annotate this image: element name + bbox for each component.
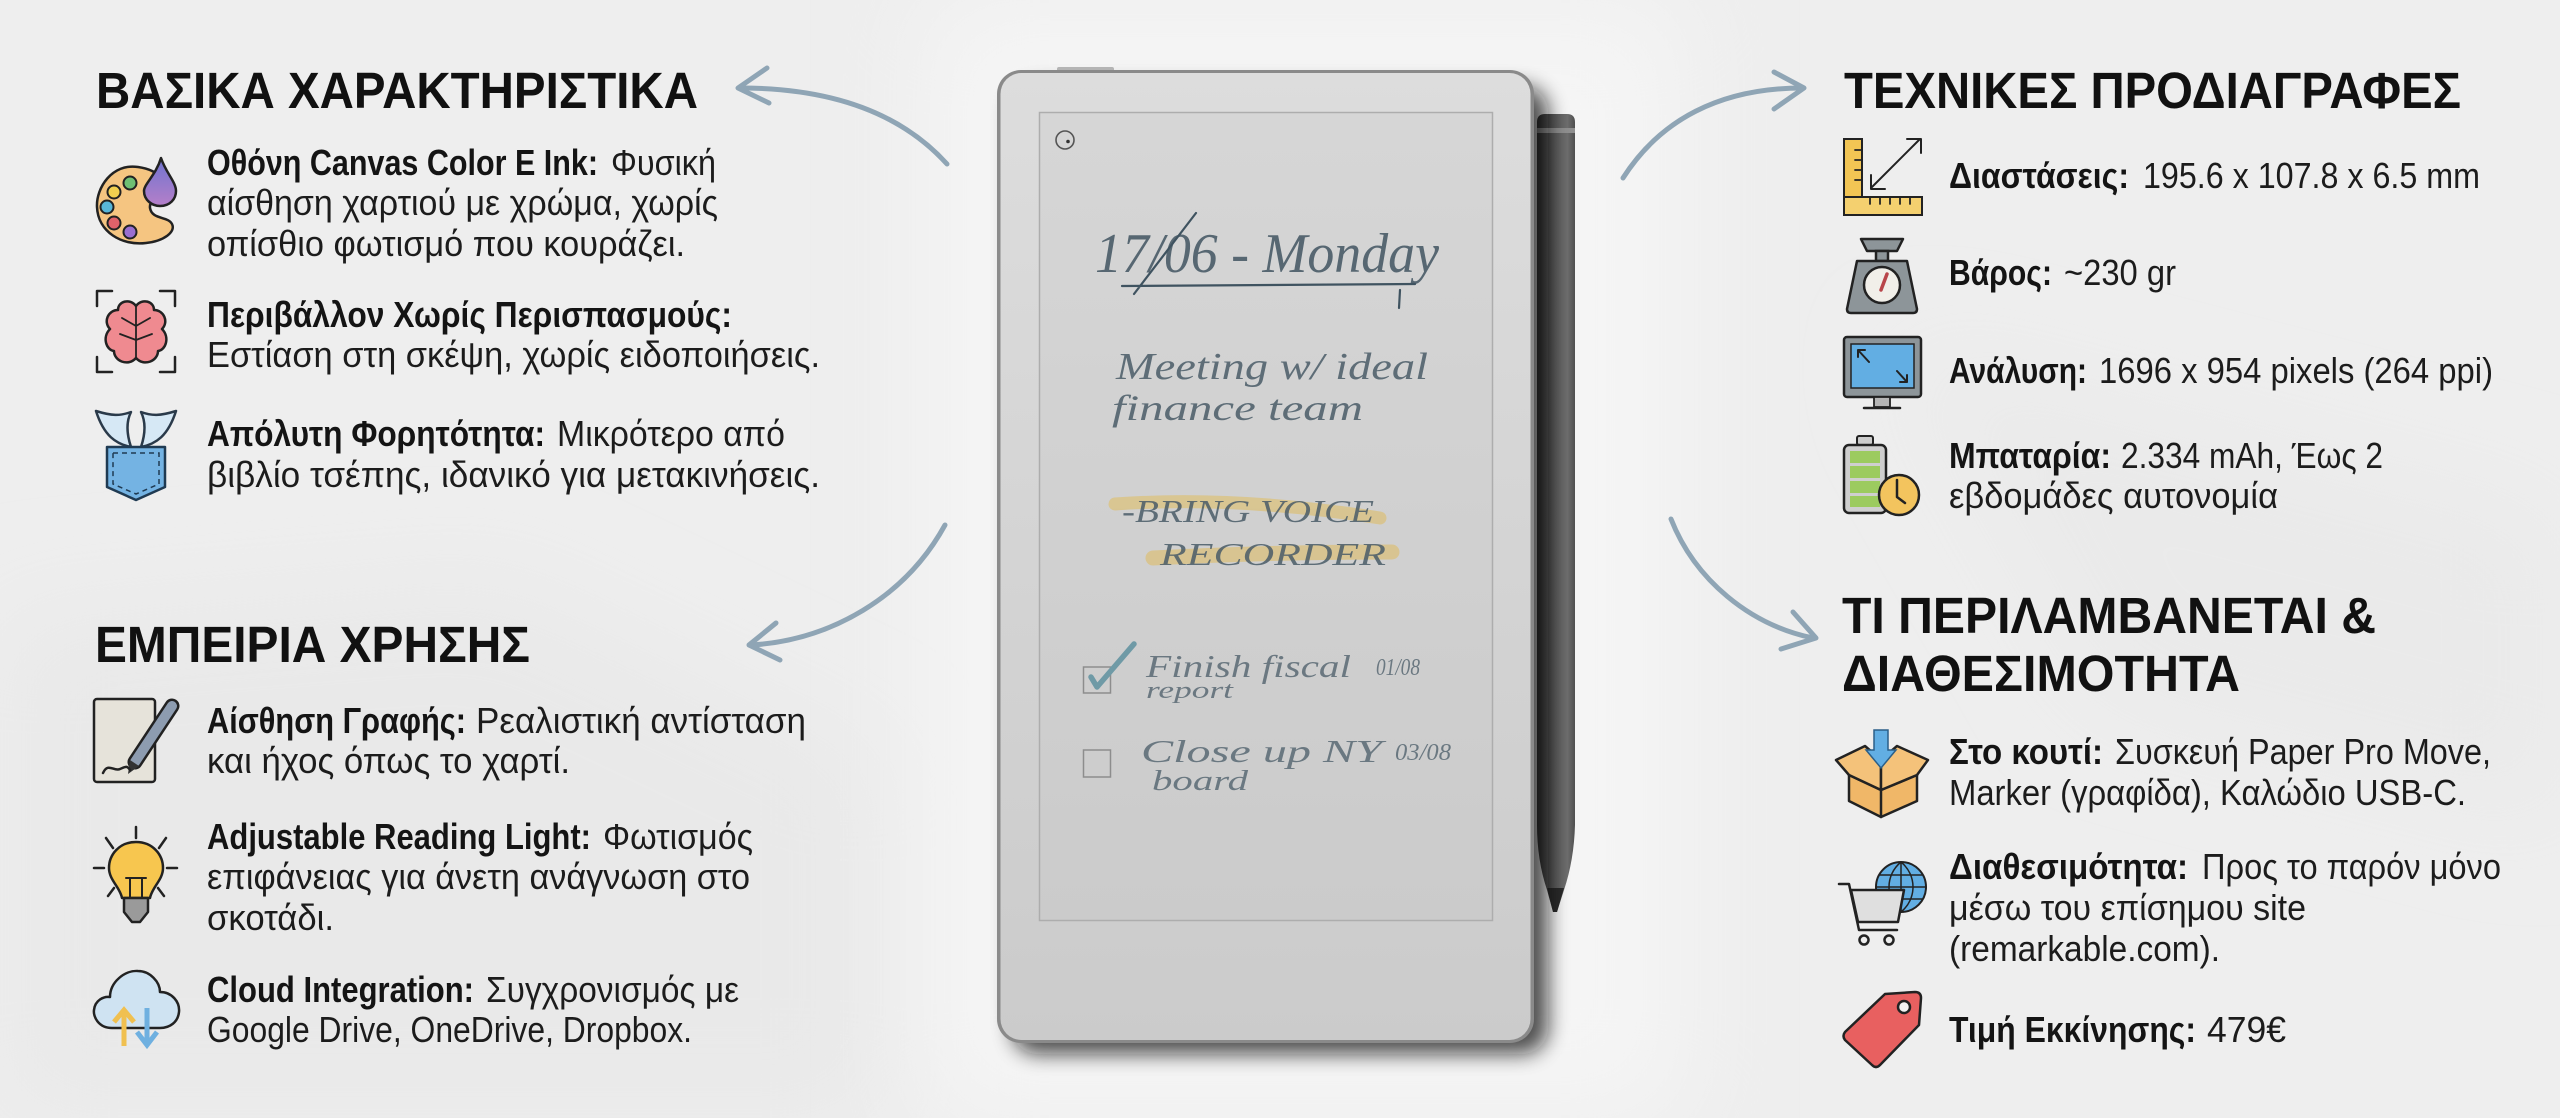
device shadow: [1012, 86, 1548, 1054]
item: distraction free: [97, 291, 820, 375]
panel: technical specs: [1844, 62, 2493, 516]
icon: price tag: [1844, 992, 1921, 1067]
text: adjustable reading light: [207, 816, 753, 938]
text: writing feel: Αίσθηση Γραφής:: [207, 700, 466, 741]
item: weight: [1847, 239, 2176, 313]
heading: box contents and availability: [1842, 587, 2376, 702]
text: adjustable reading light: σκοτάδι.: [207, 897, 334, 938]
icon: monitor: [1844, 337, 1921, 408]
item: in the box: [1836, 730, 2491, 817]
text: cloud integration: Google Drive, OneDrive, Dropbox.: [207, 1009, 692, 1050]
text: weight: ~230 gr: [2064, 252, 2176, 293]
text: availability: Προς το παρόν μόνο: [2202, 846, 2501, 887]
arrow: to key features: [738, 68, 947, 164]
icon: brain in focus frame: [97, 291, 175, 372]
text: writing feel: Ρεαλιστική αντίσταση: [476, 700, 806, 741]
item: availability: [1839, 846, 2501, 969]
checklist: board: [1152, 766, 1249, 797]
checklist: [1084, 644, 1451, 797]
item: dimensions: [1844, 139, 2480, 215]
handwritten note: RECORDER: [1159, 536, 1387, 572]
text: distraction free environment: Εστίαση στη σκέψη, χωρίς ειδοποιήσεις.: [207, 334, 820, 375]
icon: winged pocket: [96, 411, 176, 500]
highlighter marks: [1115, 502, 1392, 558]
handwritten note: -BRING VOICE: [1122, 493, 1375, 529]
item: portability: [96, 411, 820, 500]
text: absolute portability: [207, 413, 820, 495]
item: canvas color screen: [97, 142, 718, 264]
text: in the box: [1949, 731, 2491, 813]
heading: box contents and availability: ΔΙΑΘΕΣΙΜΟΤΗΤΑ: [1842, 645, 2240, 702]
text: adjustable reading light: Φωτισμός: [603, 816, 753, 857]
icon: cart and globe: [1839, 862, 1926, 944]
text: starting price: 479€: [2207, 1009, 2286, 1050]
panel: key features: [96, 62, 820, 500]
icon: light bulb: [94, 827, 177, 922]
icon: paper and pen: [94, 699, 172, 782]
item: reading light: [94, 816, 753, 938]
text: canvas color e ink: οπίσθιο φωτισμό που κουράζει.: [207, 223, 685, 264]
handwritten note: [1095, 213, 1439, 572]
item: writing feel: [94, 699, 806, 782]
text: absolute portability: Απόλυτη Φορητότητα:: [207, 413, 545, 454]
text: weight: [1949, 252, 2176, 293]
text: absolute portability: βιβλίο τσέπης, ιδανικό για μετακινήσεις.: [207, 454, 820, 495]
panel: box contents and availability: [1836, 587, 2501, 1067]
text: canvas color e ink: Φυσική: [611, 142, 716, 183]
item: battery: [1844, 435, 2383, 516]
text: resolution: [1949, 350, 2493, 391]
text: distraction free environment: [207, 294, 820, 375]
text: distraction free environment: Περιβάλλον Χωρίς Περισπασμούς:: [207, 294, 732, 335]
panel: user experience: [94, 616, 806, 1050]
device: e-ink tablet: [997, 67, 1534, 1043]
arrow: to technical specs: [1623, 72, 1804, 178]
text: availability: (remarkable.com).: [1949, 928, 2220, 969]
handwritten note: 17/06 - Monday: [1095, 223, 1439, 285]
text: availability: [1949, 846, 2501, 969]
text: cloud integration: Συγχρονισμός με: [486, 969, 739, 1010]
text: availability: μέσω του επίσημου site: [1949, 887, 2306, 928]
text: canvas color e ink: Οθόνη Canvas Color E Ink:: [207, 142, 598, 183]
stylus marker: [1537, 114, 1575, 912]
text: writing feel: και ήχος όπως το χαρτί.: [207, 740, 570, 781]
text: absolute portability: Μικρότερο από: [557, 413, 785, 454]
text: canvas color e ink: [207, 142, 718, 264]
checklist: report: [1146, 678, 1235, 704]
text: battery: 2.334 mAh, Έως 2: [2121, 435, 2383, 476]
text: dimensions: Διαστάσεις:: [1949, 155, 2129, 196]
text: cloud integration: Cloud Integration:: [207, 969, 474, 1010]
text: availability: Διαθεσιμότητα:: [1949, 846, 2188, 887]
text: weight: Βάρος:: [1949, 252, 2052, 293]
handwritten note: finance team: [1112, 388, 1363, 428]
heading: box contents and availability: ΤΙ ΠΕΡΙΛΑΜΒΑΝΕΤΑΙ &: [1842, 587, 2376, 644]
text: in the box: Marker (γραφίδα), Καλώδιο USB-C.: [1949, 772, 2466, 813]
icon: cloud sync: [94, 971, 179, 1046]
item: resolution: [1844, 337, 2493, 408]
text: cloud integration: [207, 969, 739, 1050]
arrow: to user experience: [749, 525, 945, 660]
text: battery: [1949, 435, 2383, 516]
checklist: 03/08: [1395, 740, 1451, 766]
icon: rulers and diagonal arrow: [1844, 139, 1922, 215]
checklist: 01/08: [1376, 655, 1420, 681]
item: price: [1844, 992, 2286, 1067]
text: dimensions: [1949, 155, 2480, 196]
handwritten note: Meeting w/ ideal: [1115, 346, 1428, 388]
text: battery: Μπαταρία:: [1949, 435, 2111, 476]
icon: toolbar circle: [1056, 131, 1074, 149]
text: canvas color e ink: αίσθηση χαρτιού με χρώμα, χωρίς: [207, 182, 718, 223]
text: in the box: Συσκευή Paper Pro Move,: [2115, 731, 2491, 772]
text: starting price: Τιμή Εκκίνησης:: [1949, 1009, 2196, 1050]
text: in the box: Στο κουτί:: [1949, 731, 2103, 772]
checklist: Finish fiscal: [1145, 648, 1351, 684]
arrow: to box contents: [1671, 519, 1816, 649]
text: adjustable reading light: επιφάνειας για άνετη ανάγνωση στο: [207, 856, 750, 897]
screen frame: [1040, 112, 1492, 920]
heading: key features: ΒΑΣΙΚΑ ΧΑΡΑΚΤΗΡΙΣΤΙΚΑ: [96, 62, 698, 119]
text: resolution: Ανάλυση:: [1949, 350, 2087, 391]
text: battery: εβδομάδες αυτονομία: [1949, 475, 2278, 516]
heading: user experience: ΕΜΠΕΙΡΙΑ ΧΡΗΣΗΣ: [95, 616, 530, 673]
text: writing feel: [207, 700, 806, 781]
text: dimensions: 195.6 x 107.8 x 6.5 mm: [2143, 155, 2480, 196]
icon: kitchen scale: [1847, 239, 1917, 313]
item: cloud: [94, 969, 739, 1050]
text: adjustable reading light: Adjustable Reading Light:: [207, 816, 591, 857]
text: resolution: 1696 x 954 pixels (264 ppi): [2099, 350, 2493, 391]
icon: open box with arrow: [1836, 730, 1928, 817]
checklist: Close up NY: [1141, 733, 1387, 769]
heading: technical specs: ΤΕΧΝΙΚΕΣ ΠΡΟΔΙΑΓΡΑΦΕΣ: [1844, 62, 2461, 119]
icon: palette and drop: [97, 158, 176, 243]
icon: battery and clock: [1844, 436, 1919, 515]
